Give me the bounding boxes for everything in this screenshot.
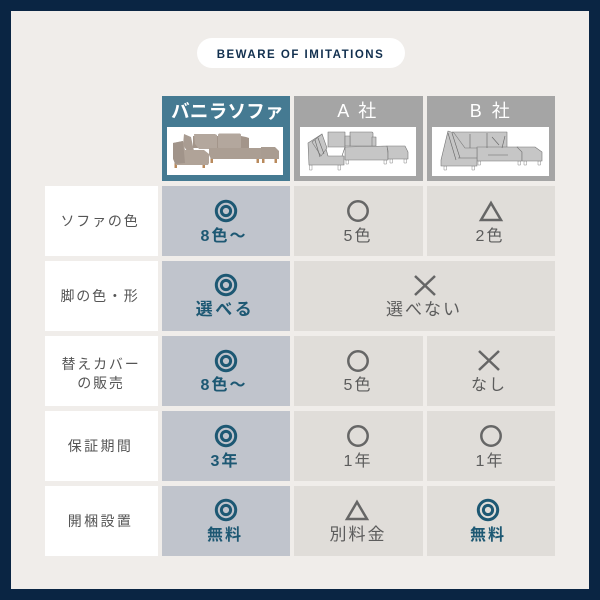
icon: grey sofa B [441,131,542,170]
A社: 1年 [294,411,423,481]
A社 and B社: 選べない [294,261,555,331]
B社: 無料: 無料 [470,526,506,544]
B社: 2色: 2色 [476,227,504,245]
label cell: 保証期間 [68,438,133,454]
label cell [45,486,158,556]
バニラソファ: 8色〜: 8色～ [201,226,247,245]
A社: 5色: 5色 [344,376,372,394]
row: ソファの色 [45,186,555,256]
バニラソファ: 3年: 3年 [211,451,239,470]
バニラソファ: 無料: 無料 [207,526,243,544]
B社: 1年 [427,411,555,481]
A社 and B社: 選べない: 選べない [386,300,462,319]
A社: 別料金: 別料金 [330,525,386,544]
label cell [45,261,158,331]
label cell [45,186,158,256]
バニラソファ: 選べる [162,261,290,331]
A社: 5色 [294,186,423,256]
B社: なし: なし [471,376,507,394]
A社: 5色: 5色 [344,227,372,245]
label cell [45,411,158,481]
title pill [197,38,405,68]
column header: B社: B 社 [470,101,512,121]
label cell: 替えカバー [62,356,140,372]
バニラソファ: 8色〜 [162,336,290,406]
B社: なし [427,336,555,406]
label cell: ソファの色 [60,213,140,229]
A社: 5色 [294,336,423,406]
row: 替えカバーの販売 [45,336,555,406]
バニラソファ: 無料 [162,486,290,556]
column header: バニラソファ [162,96,290,181]
column header: A社: A 社 [337,101,379,121]
label cell: の販売 [77,375,125,391]
row: 開梱設置 [45,486,555,556]
label cell [45,336,158,406]
B社: 無料 [427,486,555,556]
A社: 1年: 1年 [344,452,372,470]
B社: 2色 [427,186,555,256]
icon: beige sofa [173,134,279,168]
バニラソファ: 選べる: 選べる [196,300,254,319]
icon: grey sofa A [308,132,408,170]
row: 保証期間 [45,411,555,481]
バニラソファ: 8色〜 [162,186,290,256]
B社: 1年: 1年 [476,452,504,470]
column header: B社 [427,96,555,181]
row: 脚の色・形 [45,261,555,331]
バニラソファ: 3年 [162,411,290,481]
A社: 別料金 [294,486,423,556]
label cell: 脚の色・形 [60,288,140,304]
column header: A社 [294,96,423,181]
title pill: BEWARE OF IMITATIONS [217,49,384,61]
label cell: 開梱設置 [68,513,133,529]
バニラソファ: 8色〜: 8色～ [201,375,247,394]
column header: バニラソファ: バニラソファ [171,101,284,122]
